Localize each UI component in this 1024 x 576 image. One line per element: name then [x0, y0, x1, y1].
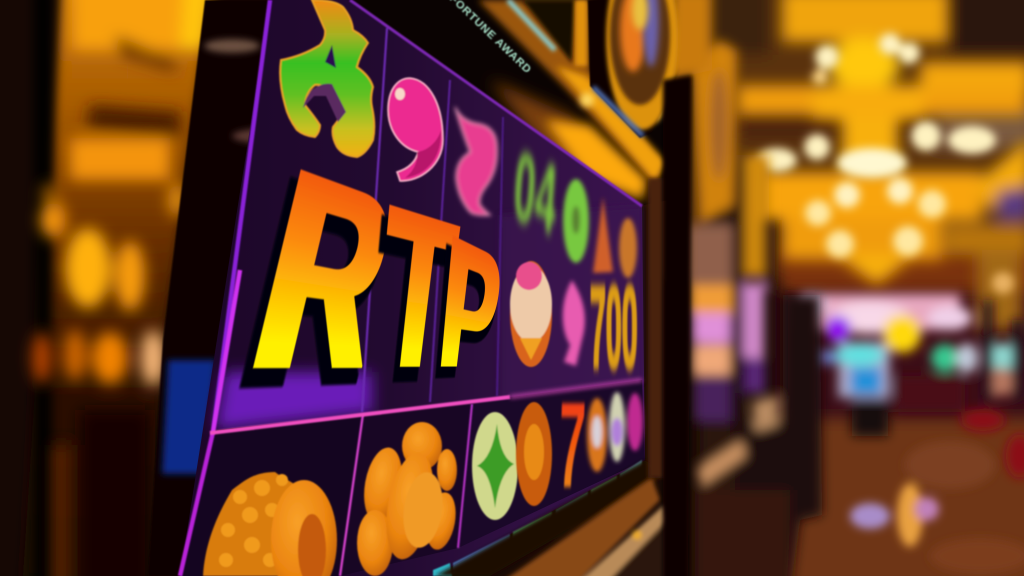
title letter T: T [379, 158, 557, 537]
lower machine frame [435, 460, 668, 576]
purple glow below title [215, 372, 372, 430]
upper panel [478, 0, 666, 185]
symbol: triangle [593, 197, 613, 273]
machine trays [696, 440, 746, 486]
symbol: pink seven [455, 107, 497, 215]
reel symbols top row [280, 0, 637, 278]
screen bezel [148, 0, 312, 576]
symbol: green oval [563, 179, 589, 263]
screen grid lines [180, 0, 642, 576]
symbol: gold numbers: 700 [590, 263, 638, 392]
machine screen 1 [692, 40, 737, 222]
circular medallion [588, 0, 712, 138]
symbol: cake [510, 261, 552, 367]
distant slot machines [798, 293, 1024, 478]
background: casino hall [660, 0, 1024, 576]
symbol: pink comma [388, 78, 443, 181]
title letter R: R [212, 120, 496, 517]
right cabinets [688, 40, 822, 576]
glowing divider [210, 397, 510, 433]
title letter R: R [225, 109, 508, 506]
floor reflections [850, 441, 1024, 574]
title letter R [212, 109, 508, 517]
symbol: orange coins [357, 422, 460, 576]
bottom indicator bars [433, 460, 642, 576]
machine side pillar [648, 75, 692, 576]
title letter T [378, 143, 562, 537]
symbol: gold pile [203, 472, 337, 576]
symbol: pink drop [563, 280, 585, 366]
title letter P: P [419, 182, 762, 576]
gold glow [545, 120, 648, 200]
symbol: orange oval [516, 402, 552, 506]
title letter T: T [383, 143, 562, 522]
symbol: red seven: 7 [556, 377, 588, 513]
symbol: small ovals [587, 392, 643, 472]
symbol: narrow icon [619, 218, 637, 278]
blue side strip [162, 360, 216, 474]
left cabinet [0, 0, 220, 576]
reel symbols bottom row [203, 377, 643, 576]
upper machine frame [340, 0, 712, 206]
symbol: green number: 04 [510, 129, 561, 256]
ceiling and chandeliers [737, 0, 1024, 330]
chandelier lights [757, 33, 1014, 294]
symbol: ornate letter A [280, 0, 374, 157]
title letter P: P [419, 166, 762, 576]
screen panel [180, 0, 645, 576]
symbol: green diamond [472, 412, 518, 520]
reel symbols middle row [510, 261, 638, 392]
title letter P [419, 166, 762, 576]
machine screen 2 [743, 283, 764, 358]
